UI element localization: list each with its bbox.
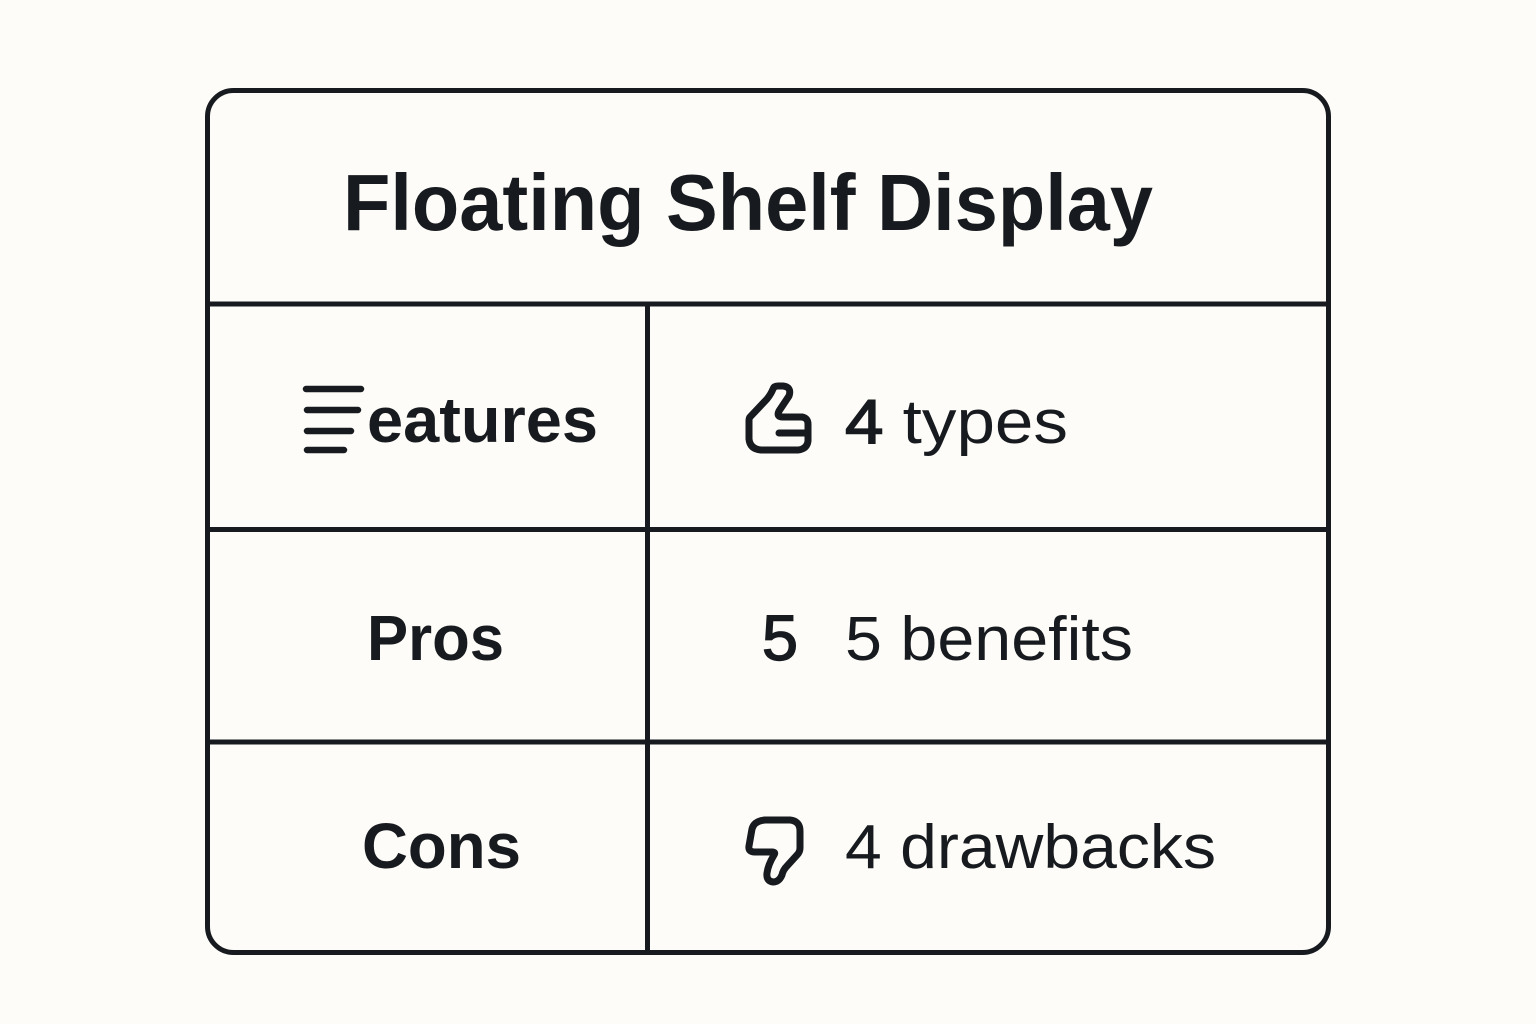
icon: numeral five: 5 [762, 602, 798, 674]
table panel [208, 90, 1328, 952]
icon: thumbs down [749, 820, 800, 882]
icon: thumbs up [749, 386, 808, 450]
pros label: Pros [367, 602, 504, 674]
title: Floating Shelf Display [343, 158, 1153, 247]
features label: eatures [367, 384, 598, 456]
pros value: 5 benefits [845, 605, 1133, 674]
features value: 4 types [845, 388, 1068, 457]
icon: list lines [306, 389, 361, 450]
cons label: Cons [362, 810, 521, 882]
cons value: 4 drawbacks [845, 813, 1216, 882]
